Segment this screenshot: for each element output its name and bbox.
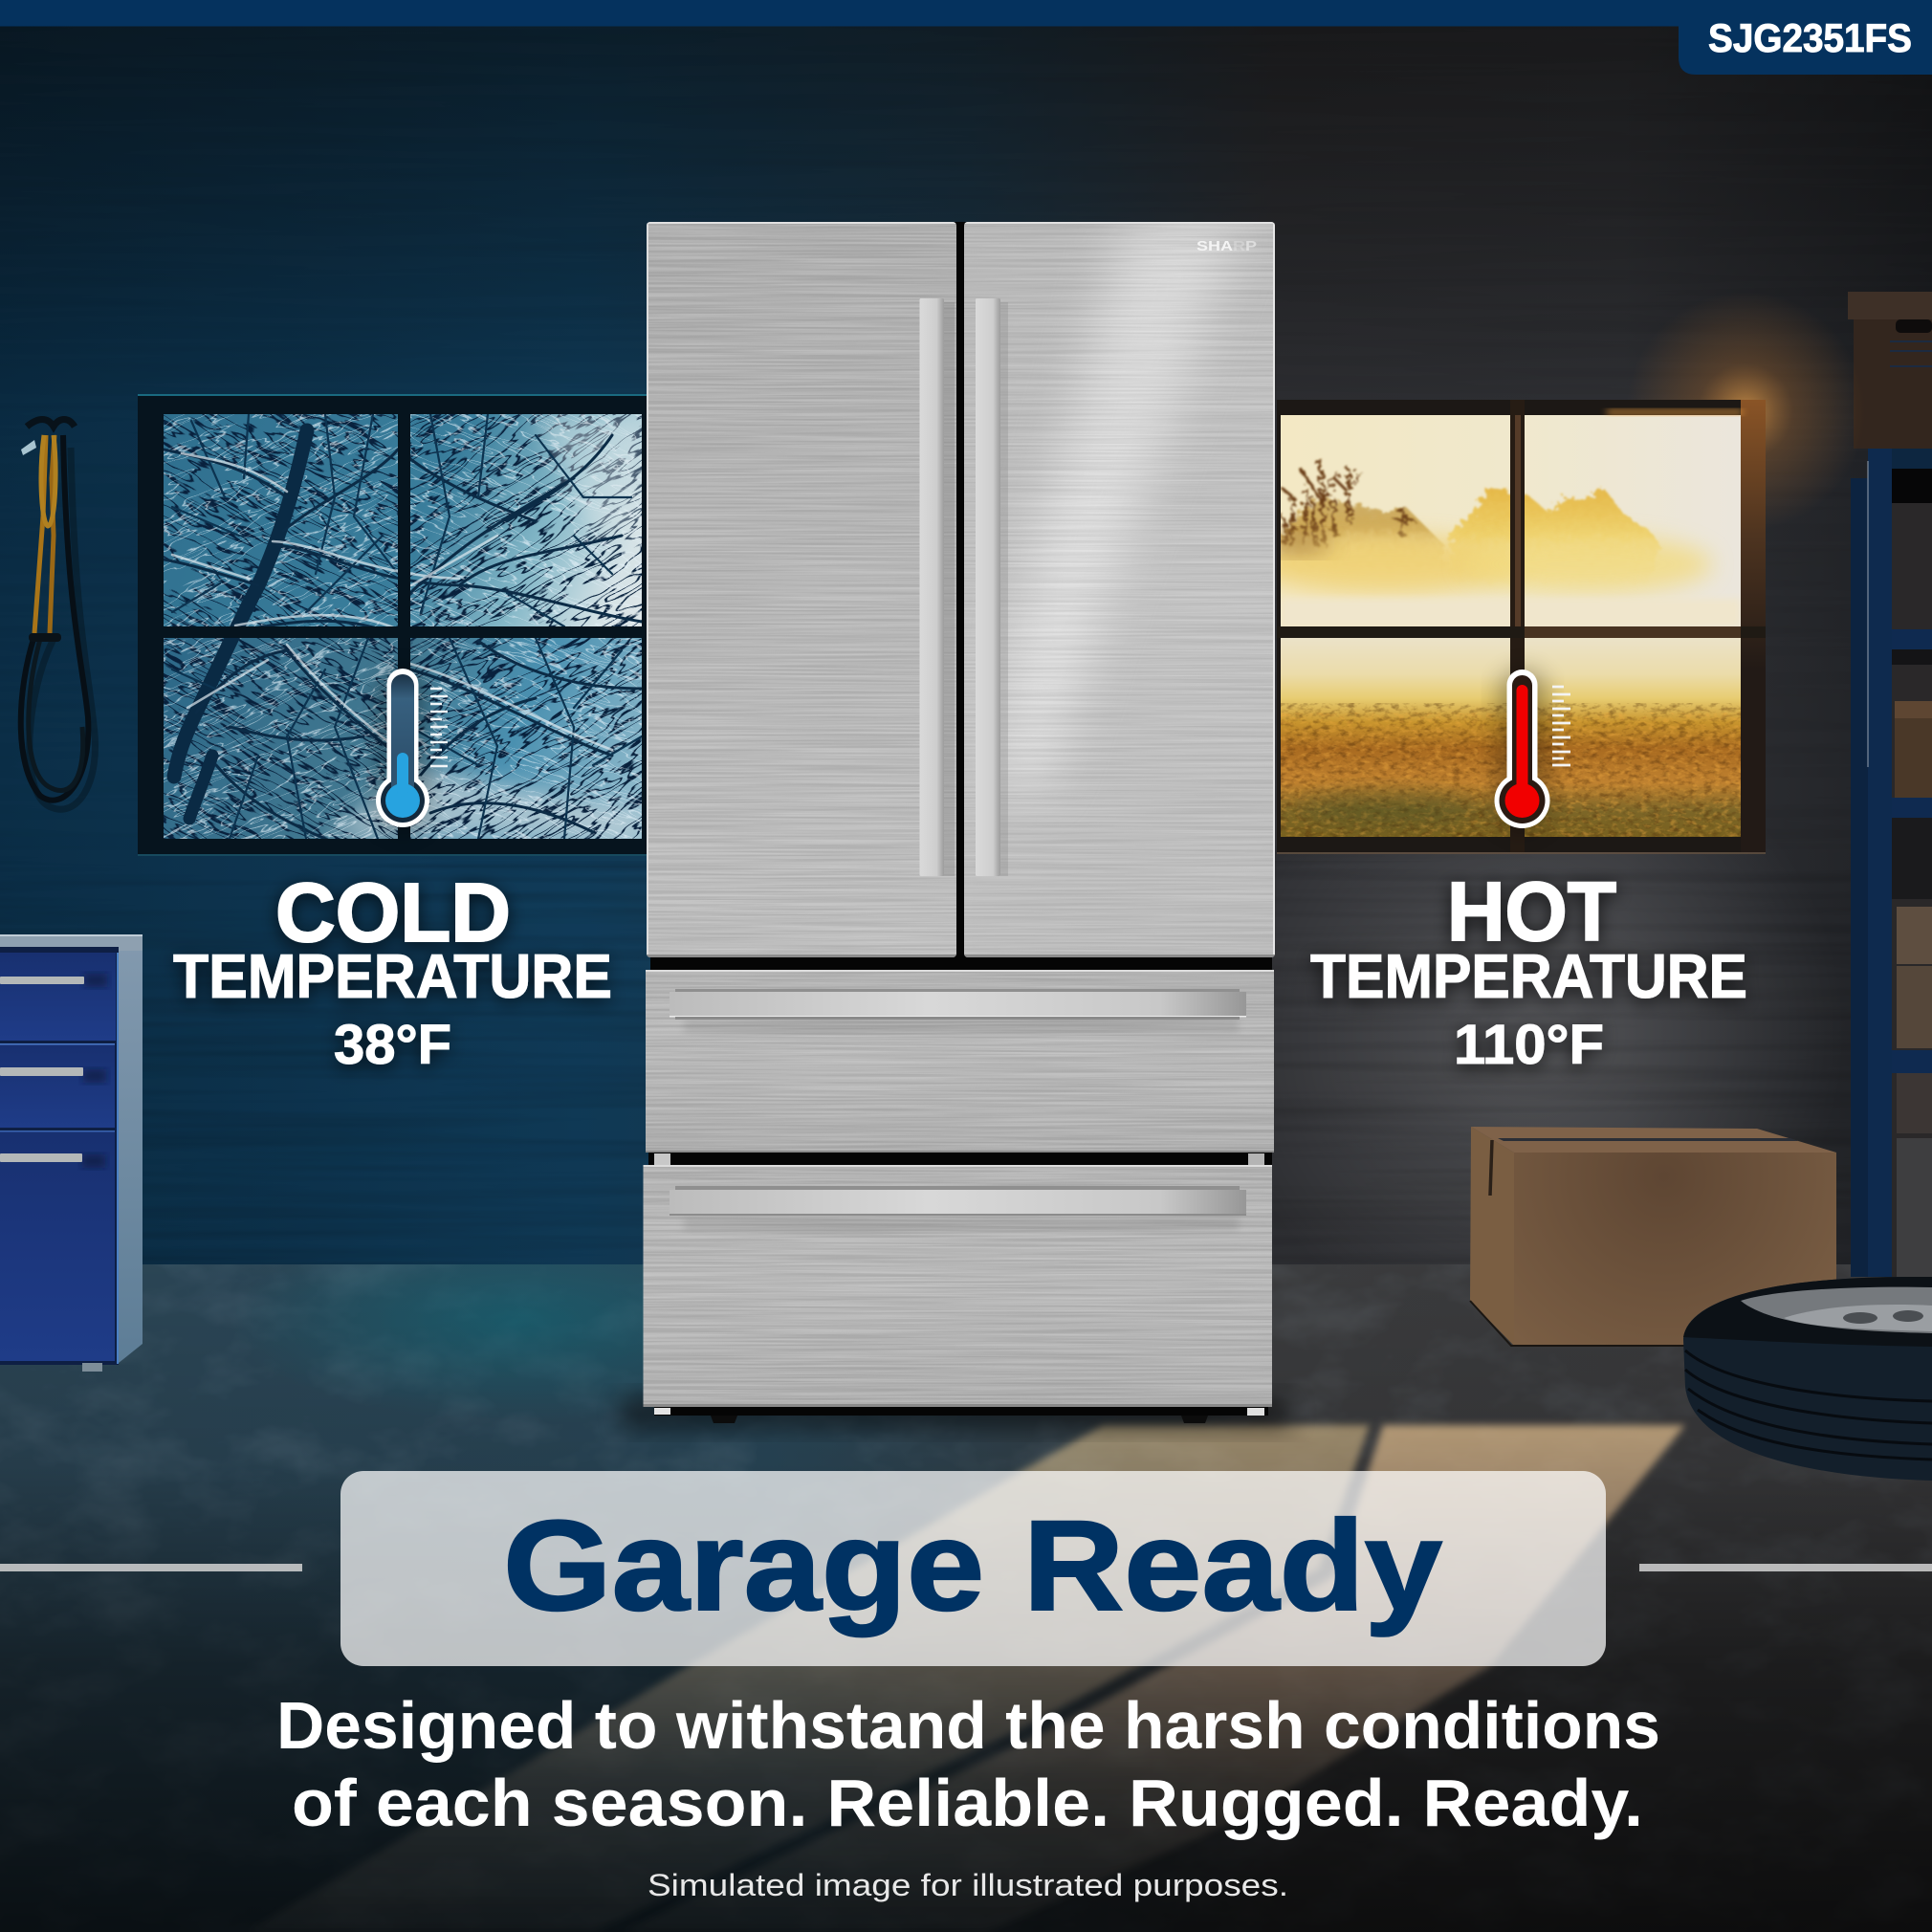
window mullions (1277, 400, 1766, 852)
concrete floor (0, 1264, 1932, 1932)
tree branches (164, 414, 642, 839)
left divider rule (0, 1564, 302, 1571)
upper drawer (646, 970, 1274, 1153)
tool cabinet (0, 934, 143, 1372)
window mullions (138, 396, 648, 854)
left door (647, 222, 956, 957)
bare branches (1282, 459, 1414, 545)
hanging hose (21, 419, 96, 809)
fridge body gaps (648, 222, 1272, 1416)
model tab (0, 0, 1932, 75)
sun glow behind hot window (1626, 292, 1932, 531)
right divider rule (1639, 1564, 1932, 1571)
right door handle (976, 298, 1008, 876)
sunny field scene (1253, 415, 1741, 837)
cold window (138, 394, 647, 856)
winter tree scene (164, 414, 642, 839)
temperature ticks (430, 689, 448, 766)
cold value: 38°F (334, 1014, 451, 1076)
description: of each season. Reliable. Rugged. Ready. (292, 1766, 1643, 1840)
cardboard box (1470, 1127, 1836, 1346)
hot window (1253, 400, 1766, 854)
hot label (1310, 866, 1747, 1076)
model number: SJG2351FS (1708, 17, 1912, 60)
stored box on top (1848, 292, 1932, 449)
cold heading: COLD (275, 867, 511, 959)
cold thermometer (376, 669, 448, 832)
hot thermometer (1494, 670, 1570, 832)
hot value: 110°F (1454, 1014, 1604, 1076)
cabinet handles (0, 974, 107, 1168)
garage wall background (0, 0, 1932, 1272)
French door refrigerator (643, 222, 1275, 1423)
lower drawer (643, 1165, 1272, 1407)
right door (964, 222, 1275, 957)
distant trees (1281, 457, 1662, 564)
title: Garage Ready (503, 1495, 1442, 1637)
disclaimer: Simulated image for illustrated purposes. (648, 1868, 1288, 1902)
storage shelving with boxes (1848, 292, 1932, 1277)
sunlight patch on floor (247, 1425, 1685, 1932)
cabinet drawers (0, 953, 119, 1364)
brand logo: SHA RP (1197, 239, 1257, 254)
shelf uprights (1851, 449, 1932, 1277)
hinges and feet (654, 1153, 1264, 1423)
description: Designed to withstand the harsh conditions (276, 1688, 1660, 1763)
description (276, 1688, 1660, 1840)
tire (1683, 1277, 1932, 1481)
hot subheading: TEMPERATURE (1310, 942, 1747, 1012)
wheel rim (1741, 1287, 1932, 1333)
boxes on shelves (1895, 701, 1932, 1277)
tread grooves (1685, 1350, 1932, 1460)
lower drawer handle (670, 1186, 1246, 1231)
left door handle (920, 298, 955, 876)
upper drawer handle (670, 989, 1246, 1033)
title panel (340, 1471, 1606, 1666)
refrigerator shadow (622, 1396, 1291, 1429)
hot heading: HOT (1447, 866, 1616, 958)
temperature ticks (1552, 687, 1570, 765)
cold label (173, 867, 612, 1076)
cold subheading: TEMPERATURE (173, 942, 612, 1012)
